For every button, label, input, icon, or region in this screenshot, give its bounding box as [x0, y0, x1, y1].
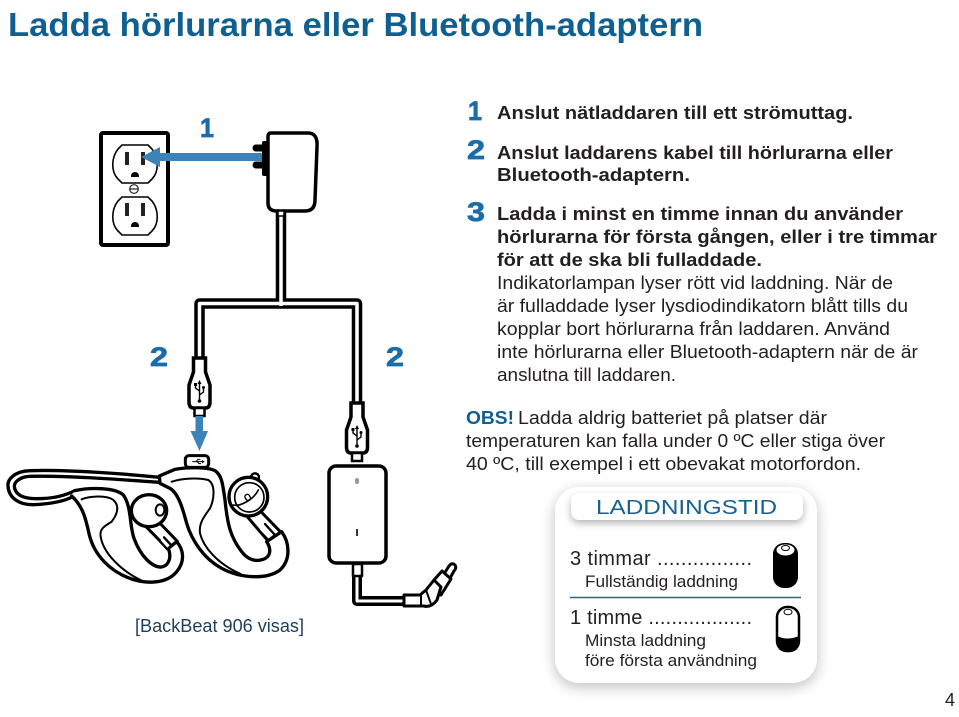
wall outlet — [101, 133, 168, 245]
label 1: 1 — [200, 113, 214, 143]
headset USB port — [185, 456, 209, 467]
step 3: kopplar bort hörlurarna från laddaren. Använd — [497, 318, 890, 339]
panel heading — [571, 493, 803, 523]
label 2 left: 2 — [150, 342, 168, 372]
neckband — [8, 470, 159, 505]
panel: charging time — [555, 487, 817, 687]
panel heading: LADDNINGSTID — [596, 497, 777, 519]
step 3: för att de ska bli fulladdade. — [497, 249, 762, 270]
row: 1 hour: 1 timme .................. — [570, 607, 752, 629]
row: 1 hour: Minsta laddning — [585, 631, 706, 650]
page number: 4 — [945, 690, 955, 710]
step 3 — [467, 197, 937, 385]
power adapter — [256, 133, 317, 216]
step 3: är fulladdade lyser lysdiodindikatorn blått tills du — [497, 295, 908, 316]
step 2: Anslut laddarens kabel till hörlurarna eller — [497, 142, 893, 163]
right earpiece body — [159, 468, 288, 577]
icon: low battery — [777, 607, 799, 652]
audio cable with jack — [353, 564, 456, 606]
step 3: 3 — [467, 197, 485, 227]
row: 1 hour — [570, 607, 757, 670]
step 3: hörlurarna för första gången, eller i tre timmar — [497, 226, 937, 247]
step 1 — [468, 96, 853, 126]
row: 3 hours — [570, 548, 752, 591]
icon: full battery — [773, 543, 798, 588]
step 2: 2 — [467, 135, 485, 165]
warning note: temperaturen kan falla under 0 ºC eller stiga över — [466, 430, 885, 451]
step 1: 1 — [468, 96, 482, 126]
step 3: Ladda i minst en timme innan du använder — [497, 203, 903, 224]
step 3: Indikatorlampan lyser rött vid laddning. När de — [497, 272, 893, 293]
step 1: Anslut nätladdaren till ett strömuttag. — [497, 102, 853, 123]
step 2: Bluetooth-adaptern. — [497, 164, 690, 185]
warning note: Ladda aldrig batteriet på platser där — [518, 407, 827, 428]
left earpiece body — [72, 489, 183, 582]
row: 3 hours: Fullständig laddning — [585, 572, 738, 591]
caption: [BackBeat 906 visas] — [135, 616, 304, 636]
title: Ladda hörlurarna eller Bluetooth-adaptern — [8, 6, 703, 43]
arrow: plug into outlet — [141, 147, 262, 167]
label 2 right: 2 — [386, 342, 404, 372]
right USB connector — [346, 403, 368, 461]
row: 3 hours: 3 timmar ................ — [570, 548, 752, 570]
warning note: OBS! — [466, 407, 514, 428]
arrow: USB into headset — [190, 416, 208, 451]
Bluetooth adapter box — [329, 466, 386, 563]
left USB connector — [189, 358, 210, 416]
cable from adapter to both connectors — [200, 212, 357, 404]
divider — [570, 596, 801, 598]
row: 1 hour: före första användning — [585, 651, 757, 670]
step 2 — [467, 135, 893, 185]
warning note: 40 ºC, till exempel i ett obevakat motorfordon. — [466, 453, 861, 474]
headset — [8, 456, 288, 582]
step 3: inte hörlurarna eller Bluetooth-adaptern när de är — [497, 341, 918, 362]
warning note — [466, 407, 885, 474]
step 3: anslutna till laddaren. — [497, 364, 676, 385]
